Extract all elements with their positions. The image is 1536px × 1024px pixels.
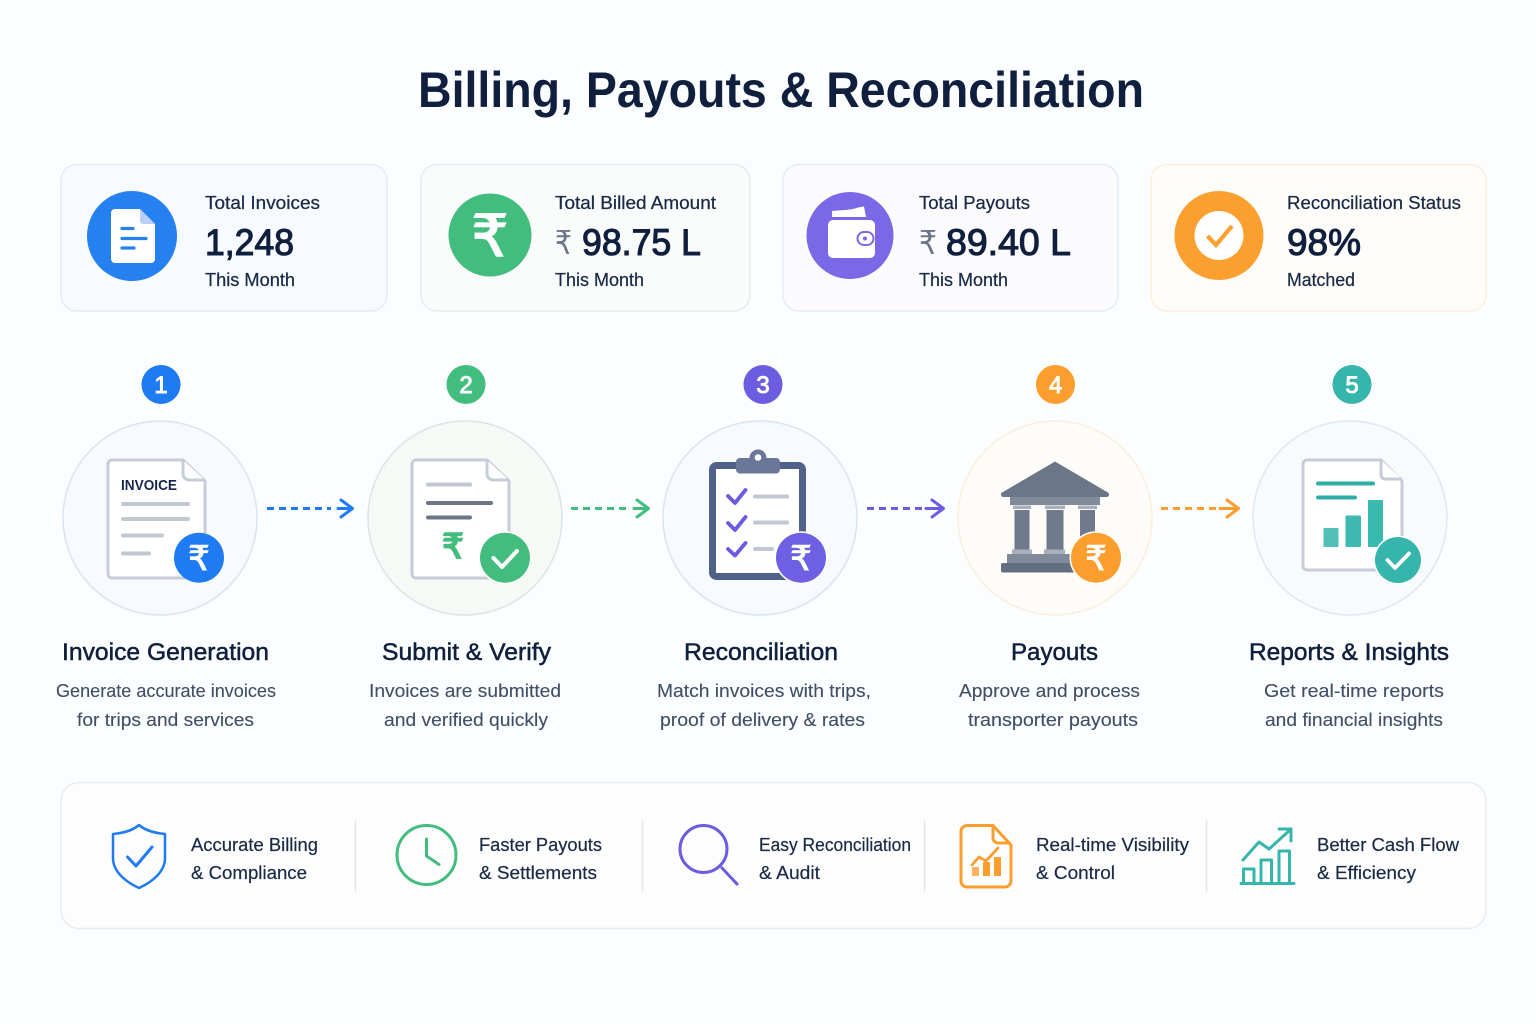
step 3: reconciliation bbox=[657, 365, 871, 730]
panel: benefits bar bbox=[61, 782, 1486, 928]
icon: shield with check bbox=[113, 825, 165, 888]
description: Invoices are submitted bbox=[369, 681, 561, 701]
step number 3 bbox=[744, 365, 782, 404]
description: for trips and services bbox=[77, 710, 254, 730]
benefit text: Better Cash Flow bbox=[1317, 835, 1460, 855]
icon: invoice with rupee badge: INVOICE bbox=[121, 478, 177, 494]
step number 3: 3 bbox=[756, 372, 770, 399]
icon: wallet bbox=[806, 192, 894, 279]
stat: total invoices text bbox=[205, 193, 320, 290]
icon: invoice document bbox=[87, 191, 177, 281]
icon: status ring with check bbox=[1174, 191, 1264, 280]
step 1: invoice generation bbox=[56, 365, 276, 730]
arrow: step 3 to 4 bbox=[867, 500, 944, 517]
benefit: real-time visibility bbox=[961, 826, 1189, 887]
stat: total payouts text: This Month bbox=[919, 270, 1008, 290]
icon: bank with rupee badge bbox=[958, 421, 1152, 615]
benefit text bbox=[1036, 835, 1189, 883]
benefit text: Real-time Visibility bbox=[1036, 835, 1189, 855]
step number 2: 2 bbox=[459, 372, 473, 399]
description: transporter payouts bbox=[968, 710, 1138, 730]
description bbox=[657, 681, 871, 730]
benefit: faster payouts bbox=[397, 826, 602, 884]
icon: document with verified check bbox=[368, 421, 562, 615]
benefit text bbox=[191, 835, 318, 883]
description: proof of delivery & rates bbox=[660, 710, 865, 730]
benefit text bbox=[759, 835, 911, 883]
stat: total billed amount text: This Month bbox=[555, 270, 644, 290]
benefit text: Faster Payouts bbox=[479, 835, 602, 855]
icon: magnifier bbox=[680, 826, 737, 884]
stat: total payouts text bbox=[919, 193, 1071, 290]
panel: total billed amount card bbox=[421, 164, 750, 311]
step number 5 bbox=[1332, 365, 1372, 404]
step 4: payouts bbox=[958, 365, 1152, 730]
stat: total billed amount text: ₹ bbox=[555, 223, 572, 262]
title: Billing, Payouts & Reconciliation bbox=[418, 62, 1144, 118]
benefit text: & Compliance bbox=[191, 863, 307, 883]
heading: Reconciliation bbox=[684, 639, 838, 666]
arrow: step 2 to 3 bbox=[571, 500, 648, 517]
description: and verified quickly bbox=[384, 710, 548, 730]
step number 1 bbox=[142, 365, 180, 404]
stat: reconciliation status text: Matched bbox=[1287, 270, 1355, 290]
heading: Payouts bbox=[1011, 639, 1098, 666]
step 5: reports and insights bbox=[1249, 365, 1449, 730]
icon: clipboard checklist with rupee badge: ₹ bbox=[790, 539, 812, 579]
stat: total payouts text: ₹ bbox=[919, 223, 937, 262]
stat: total billed amount text: 98.75 L bbox=[582, 222, 701, 263]
heading: Submit & Verify bbox=[382, 639, 551, 666]
stat: total invoices text: Total Invoices bbox=[205, 193, 320, 213]
icon: invoice with rupee badge: ₹ bbox=[188, 539, 210, 579]
benefit text bbox=[1317, 835, 1460, 883]
description bbox=[369, 681, 561, 730]
stat: total invoices text: 1,248 bbox=[205, 222, 294, 263]
icon: rupee coin: ₹ bbox=[472, 202, 508, 270]
stat: reconciliation status text bbox=[1287, 193, 1461, 290]
description: Generate accurate invoices bbox=[56, 681, 276, 701]
description bbox=[959, 681, 1140, 730]
benefit text: & Settlements bbox=[479, 863, 597, 883]
icon: bank with rupee badge: ₹ bbox=[1085, 539, 1107, 579]
description: Get real-time reports bbox=[1264, 681, 1444, 701]
step number 2 bbox=[446, 365, 486, 404]
benefit text: & Audit bbox=[759, 863, 820, 883]
benefit: better cash flow bbox=[1241, 829, 1460, 884]
step number 4: 4 bbox=[1049, 372, 1062, 399]
benefit text: Easy Reconciliation bbox=[759, 835, 911, 855]
step 2: submit and verify bbox=[368, 365, 562, 730]
stat: reconciliation status text: Reconciliation Status bbox=[1287, 193, 1461, 213]
icon: rupee coin bbox=[448, 194, 532, 276]
step number 5: 5 bbox=[1345, 372, 1359, 399]
icon: document with verified check: ₹ bbox=[442, 527, 464, 567]
heading: Reports & Insights bbox=[1249, 639, 1449, 666]
benefit text: Accurate Billing bbox=[191, 835, 318, 855]
description: and financial insights bbox=[1265, 710, 1443, 730]
icon: clipboard checklist with rupee badge bbox=[663, 421, 857, 615]
heading: Invoice Generation bbox=[62, 639, 269, 666]
benefit text bbox=[479, 835, 602, 883]
panel: reconciliation status card bbox=[1151, 164, 1486, 311]
step number 1: 1 bbox=[154, 372, 168, 399]
stat: total payouts text: Total Payouts bbox=[919, 193, 1030, 213]
icon: growth chart bbox=[1241, 829, 1294, 884]
description bbox=[56, 681, 276, 730]
stat: total invoices text: This Month bbox=[205, 270, 295, 290]
benefit text: & Control bbox=[1036, 863, 1115, 883]
panel: total payouts card bbox=[783, 164, 1118, 311]
stat: total billed amount text: Total Billed Amount bbox=[555, 193, 716, 213]
stat: total billed amount text bbox=[555, 193, 716, 290]
step number 4 bbox=[1036, 365, 1075, 404]
icon: invoice with rupee badge bbox=[63, 421, 257, 615]
arrow: step 1 to 2 bbox=[267, 500, 352, 517]
arrow: step 4 to 5 bbox=[1161, 500, 1238, 517]
description: Match invoices with trips, bbox=[657, 681, 871, 701]
icon: orange report file bbox=[961, 826, 1011, 887]
icon: report with bars and check badge bbox=[1253, 421, 1447, 615]
benefit text: & Efficiency bbox=[1317, 863, 1416, 883]
benefit: accurate billing bbox=[113, 825, 318, 888]
stat: reconciliation status text: 98% bbox=[1287, 222, 1361, 263]
icon: clock bbox=[397, 826, 456, 884]
panel: total invoices card bbox=[61, 164, 387, 311]
stat: total payouts text: 89.40 L bbox=[946, 222, 1071, 263]
description bbox=[1264, 681, 1444, 730]
description: Approve and process bbox=[959, 681, 1140, 701]
benefit: easy reconciliation bbox=[680, 826, 911, 884]
